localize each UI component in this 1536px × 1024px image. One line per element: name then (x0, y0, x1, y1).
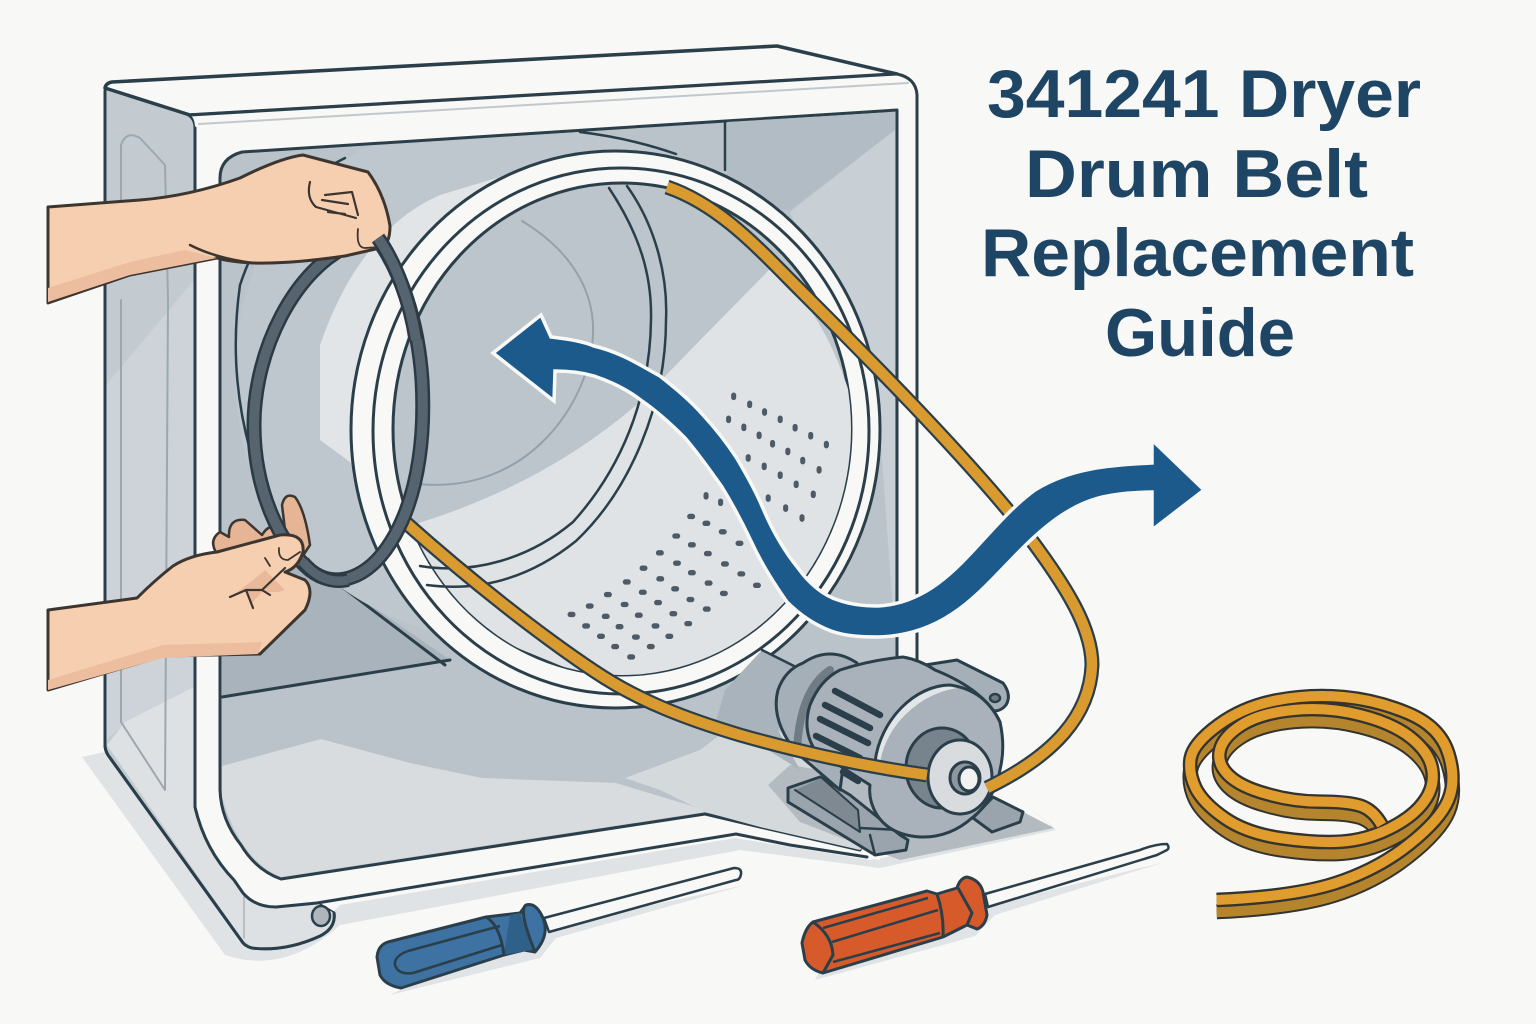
motor base right (973, 797, 1023, 832)
drum perforations (570, 395, 826, 657)
lower hand shading (48, 642, 262, 690)
upper hand arm shading (48, 250, 217, 302)
interior floor light area (222, 739, 705, 877)
title: Replacement (981, 215, 1414, 291)
front frame (190, 74, 917, 907)
cabinet top panel (105, 46, 897, 115)
motor ground shadow (768, 765, 1054, 860)
drum outer body (235, 132, 700, 690)
floor shadow under cabinet (82, 752, 1056, 961)
motor body (807, 657, 1003, 837)
dryer drum (235, 132, 880, 708)
interior lower-left dark panel (222, 540, 450, 697)
motor rear bell (776, 654, 857, 790)
motor (715, 650, 1054, 860)
cabinet interior (220, 110, 897, 879)
title: Guide (1105, 295, 1295, 371)
cabinet side panel (105, 87, 334, 949)
belt ring section over palm (303, 562, 348, 581)
black replacement belt ring (254, 240, 423, 580)
upper hand (48, 155, 390, 303)
motor mounting lug (925, 660, 1008, 711)
drum white front rings (351, 151, 880, 708)
motor end cap highlight (875, 686, 965, 762)
blue direction arrow (493, 315, 1204, 637)
orange drive belt (405, 187, 1092, 788)
dryer cabinet (105, 46, 917, 949)
drum inner lit surface (418, 270, 851, 675)
motor cooling fins (816, 691, 880, 781)
blue screwdriver (377, 868, 745, 995)
drum highlight (320, 165, 540, 495)
coiled spare belt (1190, 696, 1452, 912)
title: Drum Belt (1025, 136, 1368, 212)
lower hand (48, 535, 310, 690)
motor mounting arm (715, 650, 800, 770)
cabinet foot hole (312, 906, 330, 926)
title: 341241 Dryer (987, 56, 1421, 132)
title (981, 56, 1421, 371)
drum back rim arcs (420, 188, 651, 568)
belt ring section over thumb (378, 238, 416, 340)
red screwdriver (802, 844, 1168, 980)
lower hand back fingers (213, 496, 310, 570)
motor base left (788, 777, 908, 855)
interior back-wall right panel (727, 112, 895, 210)
motor pulley (906, 728, 978, 808)
upper hand fingers (309, 182, 358, 218)
side panel lower highlight (106, 280, 194, 740)
